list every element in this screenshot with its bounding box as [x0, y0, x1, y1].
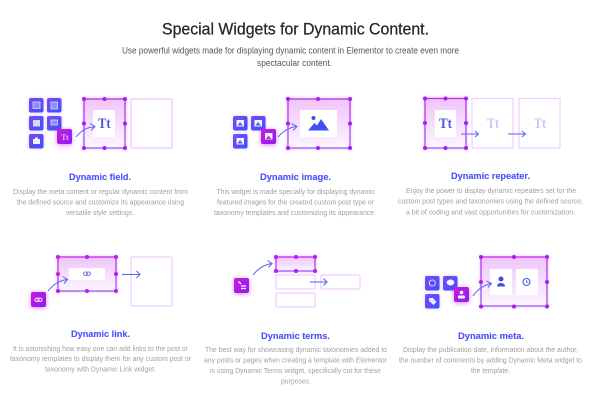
- panel: dynamic meta: [399, 255, 582, 375]
- illustration: dynamic repeater: [423, 96, 560, 150]
- description: Display the meta content or regular dynamic content from: [13, 188, 188, 196]
- description: [398, 187, 583, 216]
- arrow 2: [508, 131, 526, 137]
- description: The best way for showcasing dynamic taxonomies added to: [205, 346, 387, 354]
- heading: Dynamic repeater.: [451, 171, 530, 182]
- panel: dynamic field: [13, 97, 188, 217]
- heading: Dynamic terms.: [261, 331, 330, 342]
- ghost frame 3: Tt: [534, 116, 546, 132]
- description: Enjoy the power to display dynamic repeaters set for the: [406, 187, 576, 195]
- description: custom post types and taxonomies using the defined source,: [398, 198, 583, 206]
- panel: dynamic link: [10, 255, 192, 374]
- description: versatile style settings.: [66, 209, 134, 217]
- arrow: [278, 124, 297, 137]
- description: [13, 188, 188, 217]
- ghost frame 2: Tt: [487, 116, 499, 132]
- description: the defined source and customize its appearance using: [17, 198, 184, 206]
- empty frame: [131, 99, 172, 148]
- icon: purple image tile: [261, 129, 276, 144]
- main frame: [479, 255, 549, 308]
- arrow to box: [310, 278, 327, 286]
- heading: Dynamic link.: [71, 329, 130, 340]
- description: any posts or pages when creating a template with Elementor: [204, 356, 388, 364]
- illustration: dynamic field: [29, 97, 172, 150]
- panel: dynamic repeater: [398, 96, 583, 216]
- description: a bit of coding and vast opportunities for customization.: [406, 208, 575, 216]
- subtitle: [122, 46, 459, 68]
- description: It is astonishing how easy one can add links to the post or: [13, 345, 189, 353]
- main frame: [56, 255, 118, 293]
- arrow: [473, 281, 492, 296]
- description: [399, 346, 582, 375]
- icon: purple text tile: Tt: [62, 133, 69, 142]
- description: purposes.: [281, 378, 311, 386]
- icon: purple link tile: [31, 292, 46, 307]
- arrow to frame: [122, 271, 140, 278]
- heading: Dynamic meta.: [458, 331, 524, 342]
- subtitle: spectacular content.: [257, 58, 332, 68]
- panel: dynamic image: [214, 97, 376, 217]
- main frame: [82, 97, 127, 150]
- description: is using Dynamic Terms widget, specifically cut for these: [210, 367, 381, 375]
- icon grid: [233, 116, 266, 148]
- description: featured images for the created custom post type or: [217, 198, 375, 206]
- illustration: dynamic image: [233, 97, 352, 150]
- description: the template.: [471, 367, 510, 375]
- description: [204, 346, 388, 386]
- description: Display the publication date, information about the author,: [403, 346, 578, 354]
- arrow 1: [461, 131, 478, 137]
- panel: dynamic terms: [204, 255, 388, 386]
- icon: purple author tile: [454, 287, 469, 302]
- term boxes: [276, 275, 360, 307]
- main frame: [274, 255, 317, 273]
- description: the number of comments by adding Dynamic Meta widget to: [399, 356, 582, 364]
- main frame: Tt: [98, 116, 111, 132]
- illustration: dynamic terms: [234, 255, 360, 307]
- heading: Dynamic field.: [69, 172, 131, 183]
- icon: purple terms tile: [234, 278, 249, 293]
- description: This widget is made specially for displaying dynamic: [216, 188, 375, 196]
- icon: purple text tile: [57, 129, 72, 144]
- description: taxonomy templates to display them for any custom post or: [10, 355, 192, 363]
- arrow: [76, 124, 95, 137]
- icon grid: [425, 276, 458, 308]
- heading: Dynamic image.: [260, 172, 331, 183]
- main frame: Tt: [439, 116, 452, 132]
- description: [10, 345, 192, 374]
- empty frame: [131, 257, 172, 306]
- subtitle: Use powerful widgets made for displaying dynamic content in Elementor to create even more: [122, 46, 459, 56]
- main frame: [286, 97, 352, 150]
- illustration: dynamic meta: [425, 255, 549, 308]
- title: Special Widgets for Dynamic Content.: [162, 20, 429, 38]
- description: [214, 188, 376, 217]
- illustration: dynamic link: [31, 255, 172, 307]
- arrow: [253, 260, 272, 275]
- description: taxonomy templates and customizing its appearance.: [214, 209, 376, 217]
- description: taxonomy with Dynamic Link widget.: [45, 366, 156, 374]
- icon grid: [29, 98, 62, 148]
- arrow: [48, 276, 68, 291]
